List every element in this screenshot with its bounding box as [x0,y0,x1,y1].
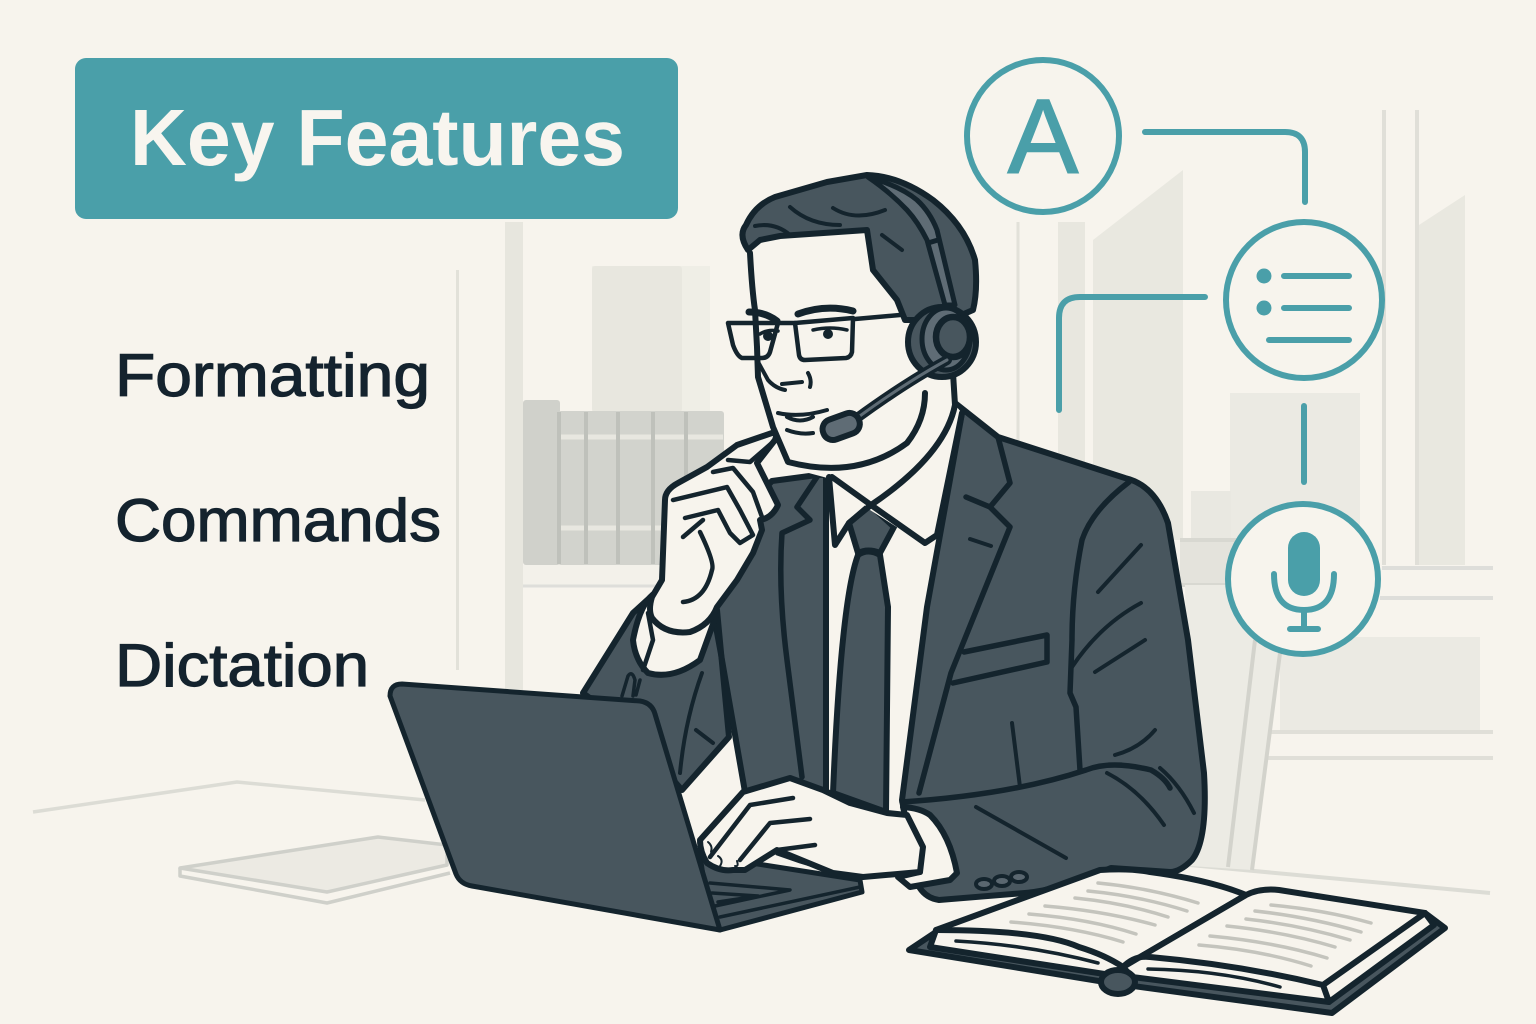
icon: letter A: A [1008,78,1079,196]
jacket lapels and seams [622,437,1194,858]
arrow: list to left [1059,297,1205,410]
sleeve buttons [976,872,1027,889]
page edges [936,913,1425,1002]
heading panel [75,58,678,219]
person [583,175,1205,900]
laptop base [700,855,862,930]
neck and collar [832,373,955,505]
nose and mouth [757,360,827,434]
hair [742,175,976,320]
feature: dictation: Dictation [115,632,369,699]
right page [1123,890,1434,1002]
icon: microphone [1228,504,1378,654]
cuff [898,807,957,887]
glasses [728,315,900,360]
typing hand and cuff [700,778,957,887]
sleeve: raised arm [583,593,729,790]
raised hand and cuff [633,433,778,675]
tie [833,505,894,812]
book cover [909,913,1445,1013]
feature: formatting: Formatting [115,342,430,409]
headset microphone [820,360,947,443]
arrow: list to microphone [1301,406,1307,482]
text lines [1011,883,1371,966]
laptop lid [390,684,720,930]
eyebrows [749,308,853,321]
icon: letter A [967,60,1119,212]
eyes [760,328,847,341]
open book [909,869,1445,1013]
face and neck [757,230,962,545]
icon: list [1226,222,1382,378]
laptop [390,684,862,930]
spine [1101,970,1135,994]
jacket: right side [902,403,1205,900]
left page [930,869,1246,975]
feature: commands: Commands [115,487,441,554]
arrow: A to list [1145,132,1305,202]
chair [1185,585,1280,870]
laptop keyboard [710,883,860,917]
hand [700,778,923,877]
desk [33,782,425,812]
tablet [180,837,450,903]
feature list [115,342,441,699]
jacket: left side [715,475,826,792]
headset band [868,177,955,305]
background: office shelves and furniture [33,110,1493,903]
title: Key Features [130,93,625,182]
headset ear cup [908,307,976,377]
feature icons and connectors [967,60,1382,654]
